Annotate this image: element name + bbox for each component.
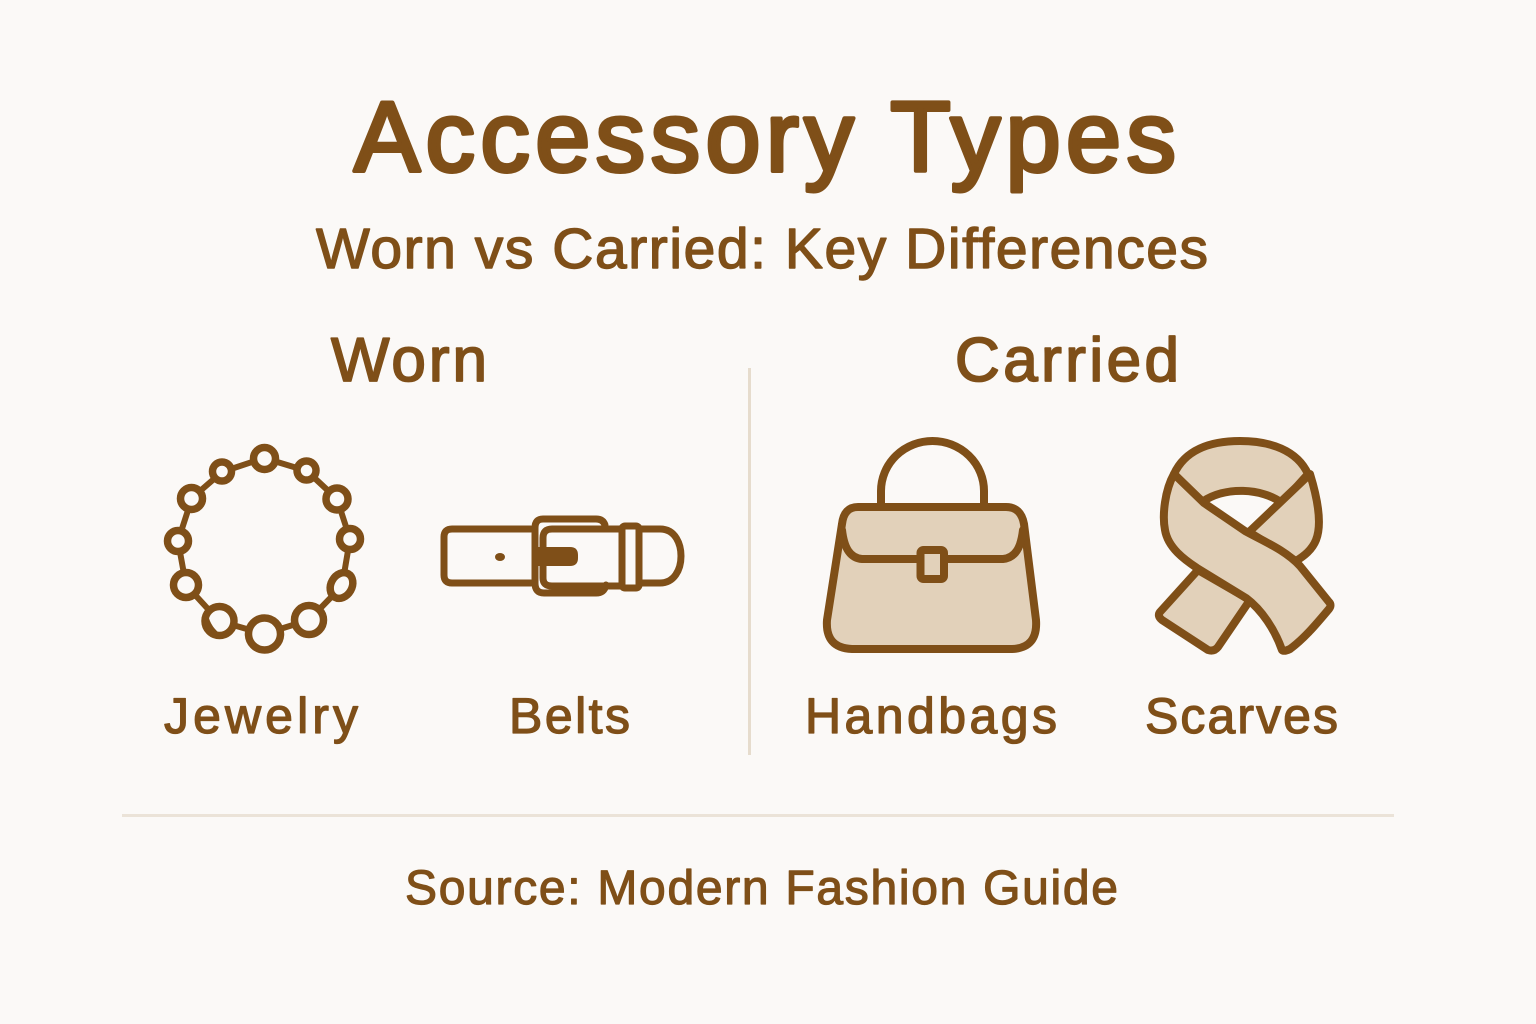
title: Accessory Types — [354, 81, 1176, 192]
label: scarves: Scarves — [1145, 688, 1338, 744]
icon: belt — [444, 519, 681, 593]
icon: handbag — [827, 441, 1036, 649]
icon: jewelry bracelet — [168, 448, 360, 650]
subtitle: Worn vs Carried: Key Differences — [316, 217, 1208, 281]
panel: carried — [805, 326, 1338, 744]
label: jewelry: Jewelry — [164, 688, 358, 744]
panel: worn — [164, 326, 681, 744]
heading: carried: Carried — [955, 326, 1179, 395]
crescent shading on bead — [206, 612, 218, 634]
horizontal divider — [122, 814, 1394, 817]
icon: scarf — [1159, 441, 1330, 651]
source line: Source: Modern Fashion Guide — [405, 862, 1118, 915]
vertical divider — [748, 368, 751, 755]
heading: worn: Worn — [331, 326, 487, 395]
label: handbags: Handbags — [805, 688, 1057, 744]
label: belts: Belts — [509, 688, 630, 744]
